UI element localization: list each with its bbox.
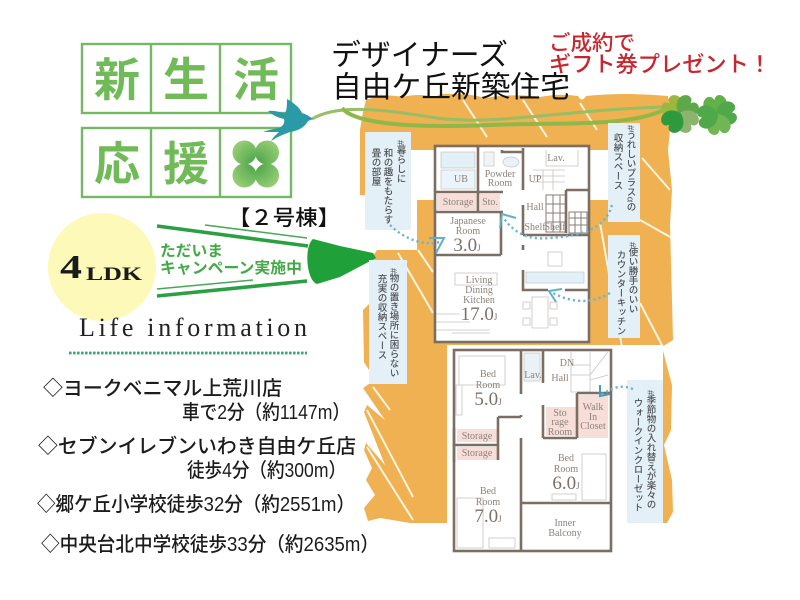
callout: counter kitchen: カウンターキッチン <box>614 250 626 336</box>
floor plan: first floor: Powder <box>485 169 516 180</box>
floor plan: second floor: Bed <box>558 453 574 464</box>
floor plan: second floor: Balcony <box>548 528 582 539</box>
campaign megaphone: ただいま <box>160 242 223 260</box>
campaign megaphone <box>157 225 376 296</box>
callout: counter kitchen: #使い勝手のいい <box>626 242 638 314</box>
floor plan: first floor: Sto. <box>482 197 498 208</box>
floor plan: first floor: Room <box>488 178 512 189</box>
floor plan: second floor: Bed <box>480 486 496 497</box>
red promo text: ギフト券プレゼント！ <box>549 52 771 77</box>
floor plan: first floor <box>435 146 589 342</box>
life information list: ◇中央台北中学校徒歩33分（約2635m） <box>41 533 379 556</box>
orange background area <box>360 94 673 530</box>
callout: walk-in closet: #季節物の入れ替えが楽々の <box>644 390 656 509</box>
floor plan: second floor: Lav. <box>524 370 542 381</box>
title panel: new life support: 新 <box>94 54 140 106</box>
title panel: new life support: 活 <box>233 54 279 106</box>
callout: walk-in closet <box>627 380 663 523</box>
floor plan: first floor: Storage <box>443 197 474 208</box>
callout: counter kitchen <box>608 235 640 338</box>
heading: designers house <box>331 39 570 104</box>
floor plan: first floor: Shelf <box>524 222 546 233</box>
floor plan: second floor: Sto <box>553 408 567 419</box>
title panel: new life support: 応 <box>94 138 140 190</box>
floor plan: first floor: Hall <box>526 202 544 213</box>
arrow: tatami room <box>390 225 444 253</box>
campaign megaphone: キャンペーン実施中 <box>160 259 302 277</box>
callout: walk-in closet: ウォークインクローゼット <box>632 398 643 512</box>
floor plan: second floor: In <box>589 412 597 423</box>
floor plan: first floor: UP <box>529 174 542 185</box>
life information heading: Life information <box>79 313 307 342</box>
floor plan: second floor: Bed <box>480 369 496 380</box>
floor plan: first floor: UB <box>454 174 468 185</box>
life information list <box>37 377 379 556</box>
floor plan: second floor: 6.0J <box>552 473 580 494</box>
callout: storage space <box>369 260 407 384</box>
floor plan: first floor: Japanese <box>450 216 486 227</box>
floor plan: second floor: Walk <box>583 402 603 413</box>
floor plan: first floor: Lav. <box>547 153 565 164</box>
floor plan: first floor: Dining <box>465 285 493 296</box>
callout: tatami room: #暮らしに <box>394 140 406 183</box>
floor plan: second floor: Room <box>554 464 578 475</box>
floor plan: second floor: Storage <box>462 431 493 442</box>
floor plan: second floor: Room <box>548 427 572 438</box>
floor plan: second floor: Room <box>476 497 500 508</box>
floor plan: second floor: Inner <box>554 518 576 529</box>
heading: designers house: デザイナーズ <box>331 39 508 72</box>
floor plan: first floor: Living <box>466 275 492 286</box>
icon: clover right <box>696 94 738 136</box>
arrow: counter kitchen <box>549 289 610 302</box>
floor plan: first floor: 17.0J <box>461 304 498 325</box>
red promo text: ご成約で <box>549 32 635 55</box>
4LDK circle <box>48 213 156 321</box>
icon: swallow <box>263 99 313 141</box>
heading: designers house: 自由ケ丘新築住宅 <box>332 71 570 104</box>
floor plan: second floor: Closet <box>580 421 606 432</box>
title panel: new life support: 援 <box>163 138 209 190</box>
floor plan: second floor: Storage <box>462 448 493 459</box>
4LDK circle: LDK <box>86 264 142 285</box>
building number heading: 【２号棟】 <box>228 207 340 230</box>
callout: tatami room: 和の趣をもたらす <box>382 148 393 224</box>
callout: tatami room <box>365 132 411 230</box>
4LDK circle: 4 <box>60 249 82 286</box>
life information list: ◇ヨークベニマル上荒川店 <box>43 377 282 400</box>
floor plan: first floor: Kitchen <box>463 295 495 306</box>
callout: extra storage: #うれしいプラスαの <box>624 125 636 212</box>
red promo text <box>549 32 771 77</box>
floor plan: second floor: 5.0J <box>474 389 502 410</box>
floor plan: second floor: DN <box>560 358 574 369</box>
callout: extra storage <box>608 123 640 222</box>
floor plan: first floor: 3.0J <box>453 235 481 256</box>
icon: clover left <box>658 92 702 136</box>
floor plan: first floor: Shelf <box>544 222 566 233</box>
floor plan: second floor <box>454 350 611 551</box>
vines <box>312 107 705 126</box>
title panel: new life support <box>82 44 291 197</box>
life information list: 車で2分（約1147m） <box>182 401 350 424</box>
callout: storage space: #物の置き場所に困らない <box>388 268 399 378</box>
callout: extra storage: 収納スペース <box>612 133 623 190</box>
life information list: ◇セブンイレブンいわき自由ケ丘店 <box>38 434 356 458</box>
title panel: new life support: 生 <box>163 54 209 106</box>
arrow: walk-in closet <box>600 385 633 396</box>
floor plan: second floor: Hall <box>551 373 569 384</box>
floor plan: first floor: Room <box>456 226 480 237</box>
callout: storage space: 充実の収納スペース <box>376 274 387 360</box>
floor plan: second floor: rage <box>551 417 569 428</box>
floor plan: second floor: 7.0J <box>474 506 502 527</box>
floor plan: second floor: Room <box>476 380 500 391</box>
arrow: extra storage <box>500 205 612 238</box>
life information list: 徒歩4分（約300m） <box>187 459 346 482</box>
callout: tatami room: 畳の部屋 <box>370 148 381 187</box>
life information list: ◇郷ケ丘小学校徒歩32分（約2551m） <box>37 493 355 516</box>
